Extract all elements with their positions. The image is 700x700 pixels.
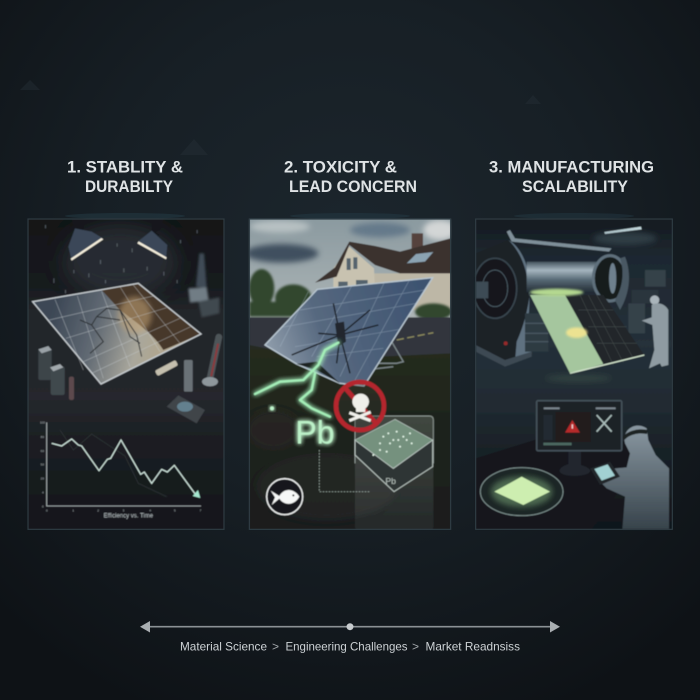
icon: no toxic skull (336, 382, 384, 430)
rain drops (45, 225, 198, 293)
panel: stability and durability (28, 219, 224, 529)
technician background (642, 295, 668, 368)
chart: efficiency vs time: Efficiency vs. Time (104, 514, 154, 520)
house (315, 233, 451, 310)
lead symbol: Pb (295, 414, 335, 450)
technician with tablet (590, 426, 669, 529)
chart: efficiency vs time: 4 (149, 508, 151, 512)
back equipment (628, 270, 666, 333)
timeline arrow (140, 621, 560, 632)
lamps (68, 219, 167, 261)
chart: efficiency vs time (40, 421, 202, 520)
cracked solar panel (33, 283, 201, 384)
monitor (537, 401, 622, 476)
chart: efficiency vs time: 0 (46, 508, 48, 512)
heading: toxicity and lead concern (284, 158, 417, 196)
lead contamination diagram (355, 416, 433, 531)
panel: toxicity and lead concern (245, 219, 457, 531)
chart: efficiency vs time: 20 (41, 477, 44, 481)
chart: efficiency vs time: 7 (200, 508, 202, 512)
timeline labels: > (272, 640, 279, 654)
trees (249, 269, 452, 320)
timeline labels: Market Readnsiss (426, 640, 520, 654)
chart: efficiency vs time: 1 (72, 508, 74, 512)
desk (476, 439, 635, 529)
timeline labels (180, 640, 520, 654)
chart: efficiency vs time: 0 (42, 504, 44, 508)
chart: efficiency vs time: 50 (41, 463, 44, 467)
heading: toxicity and lead concern: LEAD CONCERN (289, 178, 417, 196)
dashed leader line (319, 450, 371, 492)
perovskite film (530, 289, 644, 373)
heading: stability and durability: 1. STABLITY & (67, 158, 183, 176)
heading: manufacturing scalability (489, 158, 654, 196)
timeline labels: > (412, 640, 419, 654)
icon: fish (267, 479, 303, 515)
equipment background (188, 253, 219, 317)
heading: manufacturing scalability: SCALABILITY (522, 178, 628, 196)
roll to roll machine (473, 230, 629, 367)
petri dish with film (480, 468, 563, 516)
chart: efficiency vs time: 80 (41, 435, 44, 439)
panel: manufacturing scalability (473, 219, 672, 529)
heading: toxicity and lead concern: 2. TOXICITY & (284, 158, 397, 176)
chart: efficiency vs time: 2 (97, 508, 99, 512)
chart: efficiency vs time: 4 (42, 491, 44, 495)
heading: stability and durability: DURABILTY (85, 178, 173, 196)
heading: stability and durability (67, 158, 183, 196)
chart: efficiency vs time: 5 (174, 508, 176, 512)
lead contamination diagram: Pb (385, 476, 396, 486)
chart: efficiency vs time: 60 (41, 449, 44, 453)
timeline labels: Engineering Challenges (286, 640, 408, 654)
road (249, 317, 451, 357)
green lead leak (255, 343, 338, 417)
heading: manufacturing scalability: 3. MANUFACTURING (489, 158, 654, 176)
ground (249, 345, 451, 529)
chart: efficiency vs time: 3 (123, 508, 125, 512)
chart: efficiency vs time: 100 (40, 421, 45, 425)
broken solar panel (265, 278, 433, 386)
ceiling light (604, 227, 642, 234)
sensors and tools (38, 333, 223, 423)
timeline labels: Material Science (180, 640, 267, 654)
